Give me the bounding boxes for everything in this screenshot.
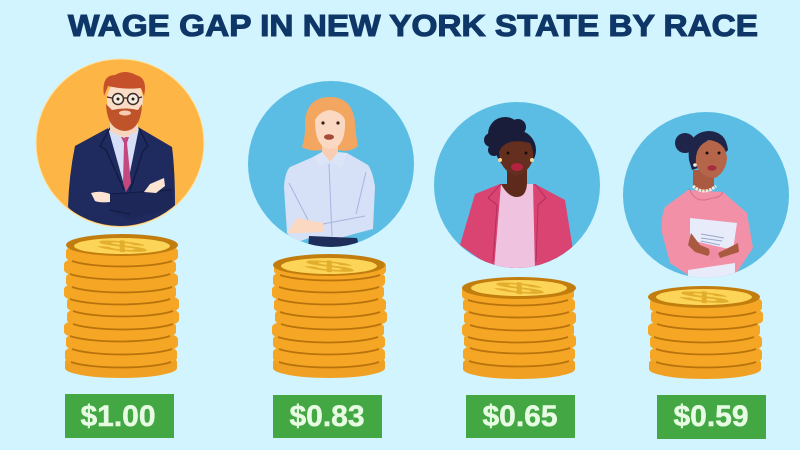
- coin stack 3: [462, 277, 576, 379]
- value label $0.65: $0.65: [482, 400, 558, 433]
- coin stack 3: $: [493, 278, 545, 298]
- portrait: blonde woman: [248, 81, 414, 250]
- value label $0.59: [657, 395, 766, 439]
- portrait: man in suit: [36, 59, 204, 228]
- portrait: Black woman in pink blazer: [434, 102, 600, 270]
- value label $0.83: $0.83: [289, 400, 365, 433]
- title: WAGE GAP IN NEW YORK STATE BY RACE: [68, 8, 758, 43]
- coin stack 1: [64, 234, 179, 378]
- coin stack 2: [272, 254, 387, 378]
- value label $1.00: [65, 394, 174, 438]
- value label $0.59: $0.59: [673, 400, 749, 433]
- value label $0.65: [466, 395, 575, 438]
- value label $1.00: $1.00: [80, 400, 156, 433]
- coin stack 2: $: [303, 256, 355, 276]
- coin stack 4: $: [678, 287, 730, 307]
- coin stack 4: [648, 286, 763, 379]
- value label $0.83: [273, 395, 382, 438]
- portrait: woman with document: [623, 112, 789, 278]
- coin stack 1: $: [96, 236, 148, 256]
